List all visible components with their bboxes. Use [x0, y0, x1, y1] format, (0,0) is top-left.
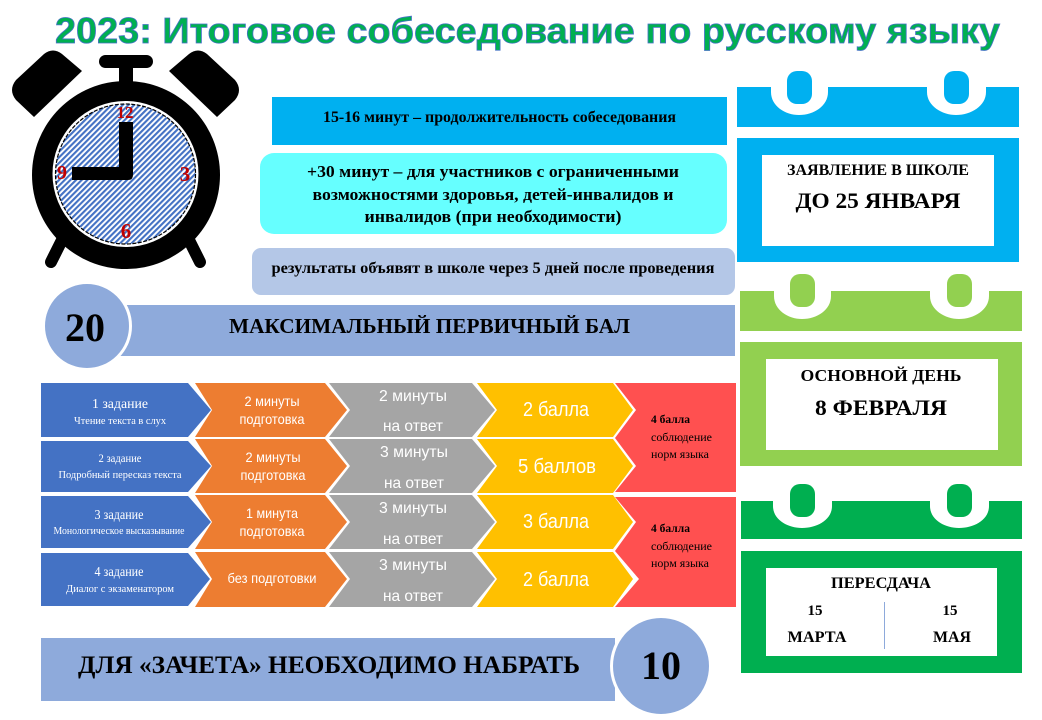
- banner: pass score: [41, 616, 710, 716]
- calendar: application deadline: ЗАЯВЛЕНИЕ В ШКОЛЕ: [787, 162, 969, 179]
- row 4: task four: [41, 552, 633, 607]
- row 2: task two: [41, 439, 633, 493]
- red block: language norms, tasks 1-2: соблюдение: [651, 430, 712, 444]
- banner: maximum score: 20: [65, 305, 105, 350]
- banner: maximum score: [44, 282, 735, 370]
- calendar: retake dates: ПЕРЕСДАЧА: [831, 575, 931, 592]
- row 3: task three: 3 минуты: [379, 500, 447, 517]
- icon: alarm clock: 6: [121, 219, 131, 243]
- row 1: task one: [41, 383, 633, 437]
- row 2: task two: 2 минуты: [246, 449, 300, 465]
- panel: extra time: возможностями здоровья, детей-инвалидов и: [312, 185, 674, 204]
- row 4: task four: 4 задание: [94, 565, 144, 580]
- row 2: task two: на ответ: [384, 475, 445, 492]
- calendar: main day: [740, 274, 1022, 466]
- calendar: retake dates: 15: [942, 603, 958, 619]
- calendar: application deadline: ДО 25 ЯНВАРЯ: [796, 188, 961, 213]
- panel: extra time: +30 минут – для участников с ограниченными: [307, 162, 680, 181]
- row 1: task one: 1 задание: [92, 397, 148, 412]
- row 4: task four: без подготовки: [228, 570, 316, 586]
- row 3: task three: [41, 495, 633, 549]
- icon: alarm clock: 9: [57, 162, 67, 184]
- row 4: task four: на ответ: [383, 588, 444, 605]
- row 2: task two: подготовка: [240, 467, 306, 483]
- row 4: task four: 3 минуты: [379, 557, 447, 574]
- row 2: task two: 2 задание: [98, 453, 142, 465]
- row 3: task three: 1 минута: [246, 505, 298, 521]
- icon: alarm clock: 3: [180, 162, 190, 186]
- calendar: retake dates: [741, 484, 1022, 673]
- row 3: task three: на ответ: [383, 531, 444, 548]
- red block: language norms, tasks 1-2: [615, 383, 736, 492]
- panel: results notice: результаты объявят в школе через 5 дней после проведения: [272, 260, 714, 277]
- row 3: task three: 3 задание: [94, 508, 144, 523]
- row 3: task three: Монологическое высказывание: [54, 525, 185, 537]
- calendar: retake dates: МАЯ: [933, 629, 971, 646]
- row 1: task one: 2 минуты: [244, 393, 300, 409]
- icon: alarm clock: 12: [116, 103, 134, 122]
- panel: extra time: [260, 153, 727, 234]
- task table: [41, 383, 736, 607]
- red block: language norms, tasks 3-4: соблюдение: [651, 539, 712, 553]
- banner: pass score: 10: [641, 643, 681, 688]
- panel: interview duration: 15-16 минут – продолжительность собеседования: [323, 109, 676, 126]
- red block: language norms, tasks 1-2: 4 балла: [651, 412, 690, 426]
- red block: language norms, tasks 3-4: [615, 497, 736, 607]
- banner: maximum score: МАКСИМАЛЬНЫЙ ПЕРВИЧНЫЙ БАЛ: [229, 314, 630, 338]
- calendar: retake dates: МАРТА: [788, 629, 847, 646]
- row 2: task two: 3 минуты: [380, 444, 448, 461]
- panel: interview duration: [272, 97, 727, 145]
- panel: extra time: инвалидов (при необходимости): [364, 207, 622, 226]
- row 2: task two: Подробный пересказ текста: [58, 469, 182, 481]
- title: 2023: Итоговое собеседование по русскому языку: [55, 10, 1000, 51]
- banner: pass score: ДЛЯ «ЗАЧЕТА» НЕОБХОДИМО НАБРАТЬ: [78, 652, 580, 679]
- row 1: task one: Чтение текста в слух: [74, 416, 167, 427]
- row 3: task three: подготовка: [240, 523, 305, 539]
- row 2: task two: 5 баллов: [518, 456, 596, 478]
- panel: results notice: [252, 248, 735, 295]
- row 1: task one: 2 минуты: [379, 388, 447, 405]
- row 1: task one: подготовка: [240, 411, 305, 427]
- calendar: main day: ОСНОВНОЙ ДЕНЬ: [800, 366, 962, 385]
- red block: language norms, tasks 1-2: норм языка: [651, 447, 710, 461]
- calendar: main day: 8 ФЕВРАЛЯ: [815, 395, 947, 420]
- row 3: task three: 3 балла: [523, 511, 590, 533]
- calendar: retake dates: 15: [808, 603, 822, 619]
- row 4: task four: Диалог с экзаменатором: [66, 583, 174, 595]
- row 1: task one: на ответ: [383, 418, 444, 435]
- icon: alarm clock: [12, 50, 239, 269]
- clock bells: [12, 50, 239, 117]
- red block: language norms, tasks 3-4: норм языка: [651, 556, 710, 570]
- calendar: application deadline: [737, 71, 1019, 262]
- row 4: task four: 2 балла: [523, 569, 590, 591]
- row 1: task one: 2 балла: [523, 399, 590, 421]
- red block: language norms, tasks 3-4: 4 балла: [651, 521, 690, 535]
